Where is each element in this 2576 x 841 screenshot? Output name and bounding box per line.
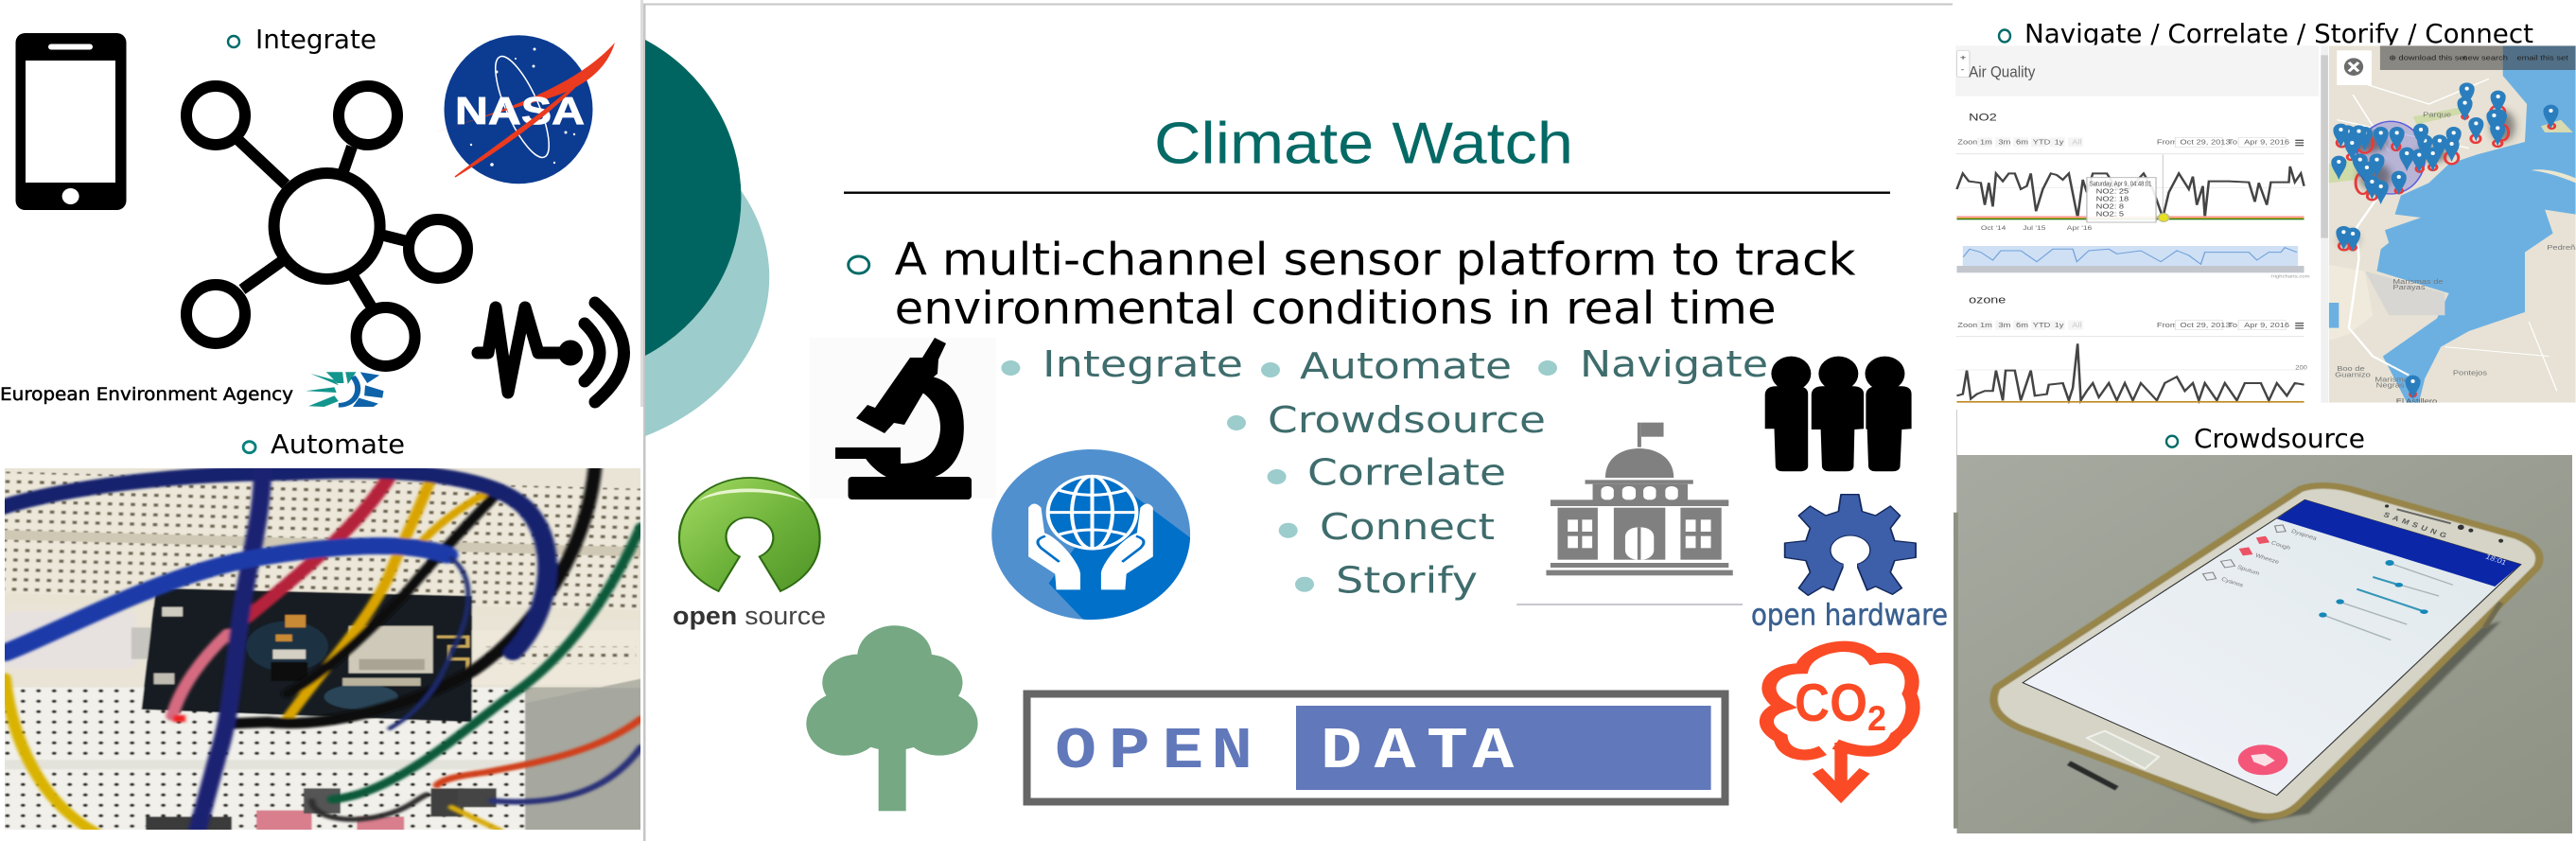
chart: ozone: From <box>2157 321 2178 329</box>
phone screen <box>2023 499 2521 796</box>
chart: NO2: NO2: 18 <box>2096 194 2129 202</box>
chart: NO2: 1y <box>2055 138 2064 146</box>
scrollbar <box>2321 45 2328 403</box>
logo: EEA <box>306 372 384 407</box>
phone branding: 18:01 <box>2484 552 2509 567</box>
chart: ozone <box>1956 293 2307 403</box>
chart: NO2: Zoom <box>1957 138 1980 146</box>
page header: - <box>1961 65 1964 75</box>
chart: ozone: 3m <box>1998 321 2010 329</box>
map close button <box>2337 50 2372 85</box>
heading: Crowdsource: Crowdsource <box>2194 423 2365 454</box>
map details <box>2329 79 2576 405</box>
chart: NO2: Apr '16 <box>2067 224 2092 232</box>
feature list: Navigate <box>1580 343 1768 385</box>
icon: sensor signal <box>478 303 624 402</box>
chart: NO2: Oct '14 <box>1981 224 2006 232</box>
divider line <box>844 191 1890 194</box>
icon: CO2 cloud: 2 <box>1867 699 1886 738</box>
badge: open data: OPEN <box>1055 720 1253 785</box>
icon: smartphone <box>15 33 127 210</box>
map toolbar: ⊕ download this set <box>2389 54 2467 61</box>
checkbox list: Wheeze <box>2254 552 2280 566</box>
panel: slide <box>640 0 1953 841</box>
feature list: Correlate <box>1307 452 1506 494</box>
decoration: teal circles <box>645 40 769 436</box>
bullet text: platform description <box>849 235 1856 335</box>
logo: NASA <box>435 35 615 184</box>
screenshot: air quality charts <box>1955 45 2328 403</box>
photo: smartphone app <box>1954 455 2572 833</box>
panel: integrate <box>0 24 624 407</box>
floating action button <box>2238 745 2287 775</box>
chart: NO2 <box>1956 111 2310 279</box>
feature list: Integrate <box>1043 343 1243 385</box>
map search radius <box>2357 121 2425 194</box>
icon: hub network <box>186 86 467 366</box>
title: Climate Watch <box>1154 112 1573 177</box>
chart: ozone: 1y <box>2055 321 2064 329</box>
chart: ozone: 6m <box>2016 321 2028 329</box>
chart: NO2: NO2: 5 <box>2096 209 2124 218</box>
bullet text: platform description: environmental conditions in real time <box>895 283 1777 335</box>
phone branding <box>2382 504 2509 567</box>
badge: open data: DATA <box>1321 720 1515 785</box>
bullet text: platform description: A multi-channel sensor platform to track <box>895 235 1856 287</box>
chart: ozone: 200 <box>2295 365 2307 371</box>
icon: people <box>1765 357 1912 471</box>
feature list: Connect <box>1320 506 1495 548</box>
map details: El Astillero <box>2396 397 2438 405</box>
map details: Boo de <box>2337 364 2365 373</box>
heading: Integrate: Integrate <box>255 24 377 55</box>
checkbox list: Sputum <box>2236 565 2261 577</box>
chart: NO2: Saturday, Apr 9, 04:48:01 <box>2090 180 2152 187</box>
map toolbar: new search <box>2462 54 2508 61</box>
map water <box>2377 45 2576 403</box>
chart: NO2: To <box>2228 138 2237 146</box>
checkbox list: Cough <box>2270 540 2292 552</box>
map pins <box>2331 82 2558 399</box>
feature list: Storify <box>1336 560 1478 602</box>
chart: ozone: Oct 29, 2013 <box>2180 321 2231 329</box>
map toolbar <box>2380 45 2576 70</box>
panel: navigate correlate storify connect <box>1955 18 2576 405</box>
icon: CO2 cloud: CO <box>1795 673 1867 733</box>
page header: + <box>1960 53 1967 62</box>
chart: NO2: All <box>2072 138 2082 146</box>
chart: ozone: To <box>2228 321 2237 329</box>
slide border <box>640 0 1953 841</box>
map details: Negras <box>2376 380 2405 389</box>
map details: Parque <box>2423 110 2451 118</box>
page header <box>1955 45 2319 96</box>
chart: NO2: 6m <box>2016 138 2028 146</box>
heading: Automate: Automate <box>271 429 405 460</box>
checkbox list: Dyspnea <box>2290 529 2318 542</box>
text: European Environment Agency: European Environment Agency <box>0 384 293 405</box>
map details: Pontejos <box>2453 369 2487 377</box>
chart: NO2: Jul '15 <box>2023 224 2045 232</box>
phone shadow <box>2008 622 2501 823</box>
chart: NO2: NO2: 8 <box>2096 201 2124 210</box>
icon: government building <box>1516 423 1743 605</box>
chart: ozone: Zoom <box>1957 321 1980 329</box>
logo: open hardware <box>1751 495 1948 633</box>
phone body <box>1994 485 2539 816</box>
logo: NASA: NASA <box>455 89 585 132</box>
chart: NO2: 1m <box>1980 138 1992 146</box>
chart: ozone: 1m <box>1980 321 1992 329</box>
panel: crowdsource <box>1954 410 2572 833</box>
logo: open source <box>673 478 826 630</box>
logo: open hardware: open hardware <box>1751 599 1948 633</box>
panel: automate <box>0 429 671 834</box>
map: sensor locations <box>2329 45 2576 405</box>
map details: Marismas de <box>2392 277 2444 286</box>
chart: NO2: Oct 29, 2013 <box>2180 138 2231 146</box>
chart: NO2: NO2 <box>1969 111 1997 123</box>
chart: ozone: Apr 9, 2016 <box>2244 321 2289 329</box>
heading: Crowdsource <box>1956 410 2365 514</box>
chart: ozone: All <box>2072 321 2082 329</box>
phone branding: SAMSUNG <box>2382 510 2448 539</box>
chart: ozone: ozone <box>1969 293 2006 306</box>
chart: NO2: Highcharts.com <box>2270 274 2310 279</box>
chart: NO2: From <box>2157 138 2178 146</box>
feature list: Automate <box>1300 345 1512 387</box>
map toolbar: email this set <box>2517 54 2568 61</box>
map details: Parayas <box>2392 283 2425 291</box>
icon: microscope <box>810 338 996 499</box>
badge: open data <box>1027 694 1726 802</box>
page header: Air Quality <box>1969 64 2036 81</box>
map details: Marismas <box>2374 375 2413 383</box>
chart: NO2: Apr 9, 2016 <box>2244 138 2289 146</box>
chart: NO2: YTD <box>2033 138 2050 146</box>
feature list <box>1001 343 1768 602</box>
sliders <box>2319 560 2453 640</box>
checkbox list <box>2203 525 2318 588</box>
icon: CO2 cloud <box>1766 646 1913 796</box>
icon: tree <box>806 625 978 811</box>
home button <box>2087 731 2159 769</box>
logo: open source: open source <box>673 602 826 630</box>
photo: breadboard with microcontroller <box>0 468 671 834</box>
map pin shadows <box>2340 111 2515 248</box>
feature list: Crowdsource <box>1268 399 1546 441</box>
heading: Navigate / Correlate / Storify / Connect: Navigate / Correlate / Storify / Connect <box>2024 18 2533 49</box>
map details: Guarnizo <box>2335 371 2371 378</box>
chart: NO2: 3m <box>1998 138 2010 146</box>
checkbox list: Cyanos <box>2220 576 2244 588</box>
chart: NO2: NO2: 25 <box>2096 187 2129 195</box>
chart: ozone: YTD <box>2033 321 2050 329</box>
icon: globe in hands <box>991 449 1192 627</box>
heading: Navigate / Correlate / Storify / Connect <box>1998 23 2533 45</box>
